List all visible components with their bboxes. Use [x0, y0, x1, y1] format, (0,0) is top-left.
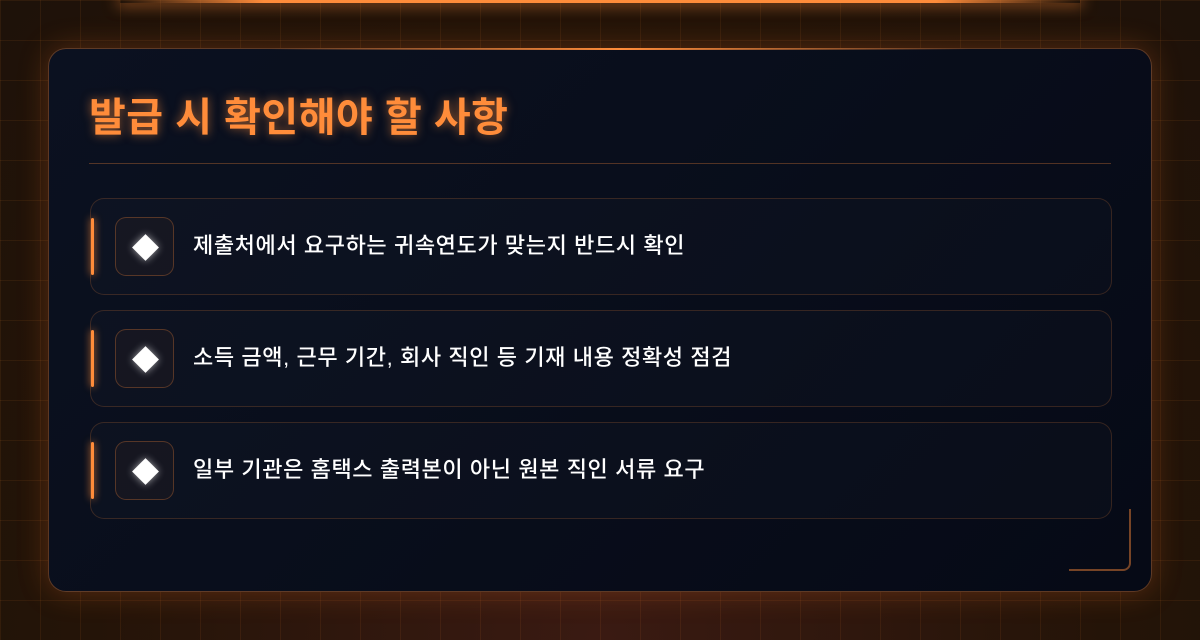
- text 1: 제출처에서 요구하는 귀속연도가 맞는지 반드시 확인: [193, 233, 685, 258]
- icon: diamond: [115, 441, 174, 500]
- icon: diamond: [115, 217, 174, 276]
- item 1: [90, 198, 1112, 295]
- text 3: 일부 기관은 홈택스 출력본이 아닌 원본 직인 서류 요구: [193, 457, 705, 482]
- title: 발급 시 확인해야 할 사항: [89, 96, 508, 140]
- panel: checklist: [48, 48, 1152, 592]
- text 2: 소득 금액, 근무 기간, 회사 직인 등 기재 내용 정확성 점검: [193, 345, 732, 370]
- icon: diamond: [115, 329, 174, 388]
- item 2: [90, 310, 1112, 407]
- item 3: [90, 422, 1112, 519]
